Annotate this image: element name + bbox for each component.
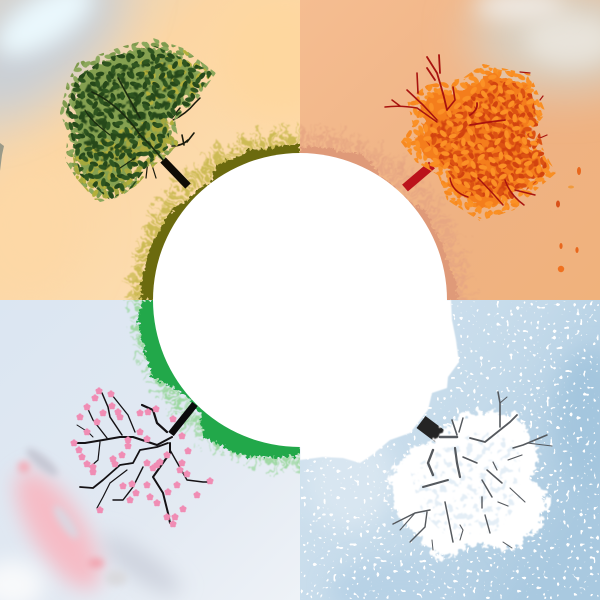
panel: autumn background bbox=[300, 0, 600, 300]
snow cloud on circle bbox=[300, 300, 459, 463]
center white circle bbox=[153, 153, 447, 447]
panel: summer background bbox=[0, 0, 300, 300]
branches bbox=[146, 98, 200, 178]
tree: autumn bbox=[385, 55, 581, 272]
falling leaves bbox=[556, 167, 581, 272]
grass tips bbox=[300, 126, 467, 300]
grass: spring bbox=[123, 300, 300, 478]
foliage bbox=[60, 38, 216, 202]
foliage bbox=[401, 64, 556, 221]
trunk bbox=[171, 404, 195, 434]
panel: winter background bbox=[300, 300, 600, 600]
snowfall speckles bbox=[300, 300, 600, 600]
grass tips bbox=[122, 122, 300, 300]
panel: spring background bbox=[0, 300, 300, 600]
trunk bbox=[421, 422, 441, 437]
branches bbox=[385, 55, 547, 205]
trunk bbox=[405, 165, 432, 188]
grass tips bbox=[123, 300, 300, 478]
tree: summer bbox=[60, 38, 216, 202]
grass: autumn bbox=[300, 126, 467, 300]
branches bbox=[393, 392, 552, 550]
grass: summer bbox=[122, 122, 300, 300]
tree: spring bbox=[70, 387, 214, 527]
snowy foliage bbox=[388, 411, 549, 562]
blossoms bbox=[70, 387, 214, 527]
inner branches bbox=[85, 78, 163, 168]
tree: winter bbox=[388, 392, 552, 562]
trunk bbox=[163, 160, 188, 186]
branches bbox=[73, 393, 210, 523]
